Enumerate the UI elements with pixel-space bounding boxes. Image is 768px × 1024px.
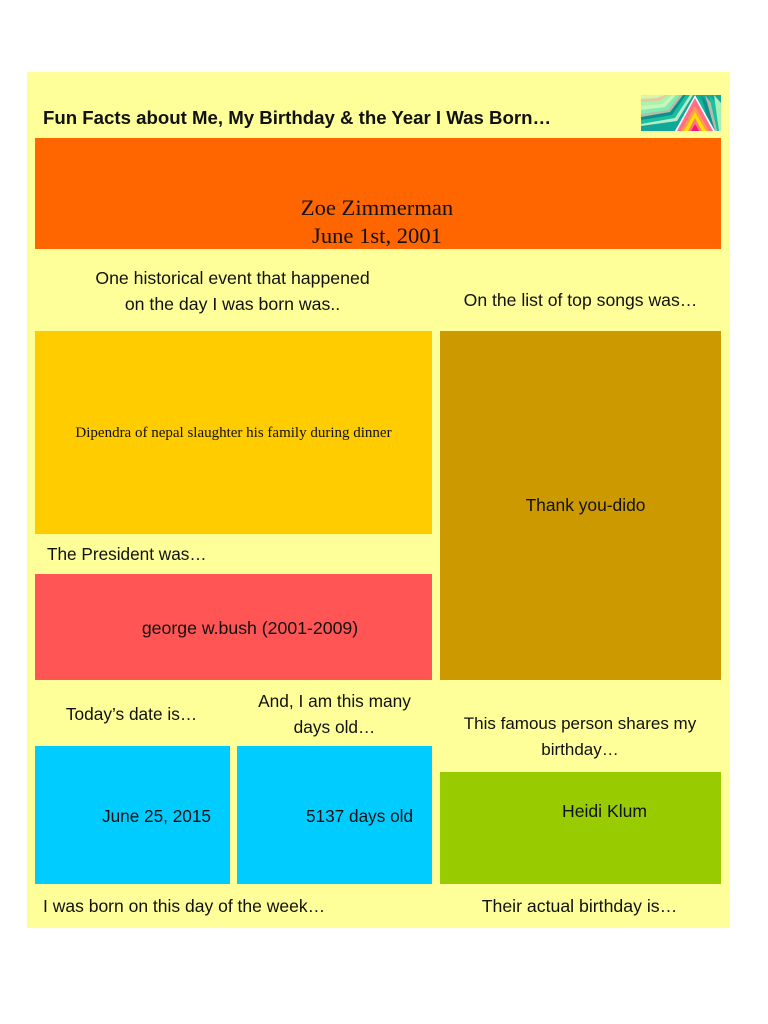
today's date text: June 25, 2015 [102, 806, 211, 826]
name and birth date: June 1st, 2001 [312, 223, 442, 248]
panel: historical event [35, 331, 432, 534]
heading: famous person: This famous person shares my [464, 714, 696, 733]
days old text: 5137 days old [306, 806, 413, 826]
icon: colourful chevron pattern [641, 95, 721, 131]
panel: today's date [35, 746, 230, 884]
heading: famous person [464, 714, 696, 758]
top song text: Thank you-dido [526, 495, 645, 515]
heading: days old: And, I am this many [258, 691, 411, 711]
president text: george w.bush (2001-2009) [142, 618, 358, 638]
panel: president [35, 574, 432, 680]
panel: name banner [35, 138, 721, 249]
heading: days old: days old… [294, 716, 375, 736]
heading: today's date: Today’s date is… [66, 704, 197, 724]
heading: actual birthday: Their actual birthday is… [482, 896, 677, 916]
name and birth date: Zoe Zimmerman [301, 195, 453, 220]
panel: famous person [440, 772, 721, 884]
heading: famous person: birthday… [541, 740, 619, 758]
panel: days old [237, 746, 432, 884]
heading: president: The President was… [47, 544, 207, 564]
heading: days old [258, 691, 411, 736]
heading: top songs: On the list of top songs was… [464, 290, 697, 310]
historical event text: Dipendra of nepal slaughter his family during dinner [75, 425, 392, 441]
panel: cream background [27, 72, 730, 928]
famous person text: Heidi Klum [562, 801, 647, 821]
heading: historical event: One historical event that happened [95, 268, 370, 288]
title: Fun Facts about Me, My Birthday & the Year I Was Born… [43, 107, 551, 128]
panel: top song [440, 331, 721, 680]
heading: historical event: on the day I was born was.. [125, 294, 340, 314]
name and birth date [301, 195, 453, 248]
heading: day of week: I was born on this day of the week… [43, 896, 325, 916]
heading: historical event [95, 268, 370, 314]
